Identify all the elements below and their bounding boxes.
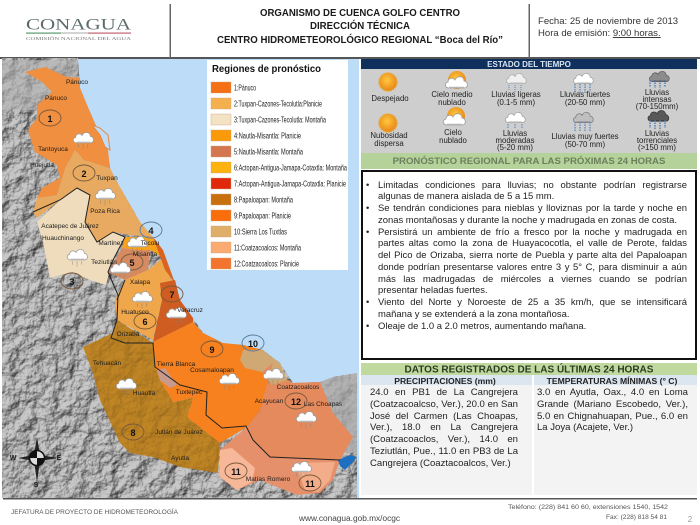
weather key labels: Lluvias <box>503 129 527 138</box>
map city labels: Tuxpan <box>96 175 118 182</box>
precipitation data: José del Carmen (Las Choapas, <box>370 410 518 422</box>
map city labels: Tehuacán <box>93 360 121 367</box>
legend swatches <box>211 82 231 269</box>
forecast heading: PRONÓSTICO REGIONAL PARA LAS PRÓXIMAS 24 HORAS <box>393 155 666 167</box>
date and emission time <box>538 16 678 39</box>
region 10: Sierra Los Tuxtlas <box>240 350 288 385</box>
legend labels: 6:Actopan-Antigua-Jamapa-Cotaxtla: Montaña <box>234 164 347 172</box>
region 4: Nautla planicie <box>122 237 163 258</box>
weather key labels: Despejado <box>371 94 409 103</box>
weather key labels: intensas <box>642 95 672 104</box>
footer website: www.conagua.gob.mx/ocgc <box>298 514 400 523</box>
icon: lluvias ligeras <box>507 73 526 92</box>
minimum temperature data: La Joya (Acajete, Ver.) <box>537 422 633 433</box>
weather key heading: ESTADO DEL TIEMPO <box>487 60 571 69</box>
footer contact: Teléfono: (228) 841 60 60, extensiones 1540, 1542 <box>508 504 668 511</box>
icon: lluvias intensas <box>650 71 669 88</box>
icon: lluvias muy fuertes <box>574 112 593 132</box>
title: DIRECCIÓN TÉCNICA <box>310 19 410 32</box>
forecast text box: • <box>366 297 369 308</box>
forecast text box: • <box>366 320 369 332</box>
region 1: Pánuco <box>25 67 110 198</box>
map city labels: Las Choapas <box>304 401 343 408</box>
compass rose: S <box>34 482 39 489</box>
minimum temperature data <box>537 387 688 433</box>
weather key labels: (>150 mm) <box>638 143 676 152</box>
forecast text box: más las madrugadas de miércoles a viernes cuando se podrían <box>378 274 687 284</box>
map region numbers: 4 <box>148 226 154 236</box>
icon: despejado <box>379 73 397 91</box>
legend labels: 3:Tuxpan-Cazones-Tecolutla: Montaña <box>234 116 326 124</box>
map city labels: Huauchinango <box>42 235 84 242</box>
map region numbers: 8 <box>130 428 136 438</box>
forecast text box: • <box>366 180 369 190</box>
icon: lluvias moderadas <box>506 112 525 129</box>
legend labels: 5:Nautla-Misantla: Montaña <box>234 148 303 156</box>
recorded data heading <box>361 362 697 376</box>
legend labels: 1:Pánuco <box>234 84 256 92</box>
map city labels <box>30 79 343 483</box>
precipitation data: (Coatzacoaclos, Ver.), 14.0 en <box>370 434 518 445</box>
map city labels: Cosamaloapan <box>190 367 234 374</box>
weather key labels: Lluvias <box>645 88 669 97</box>
forecast text box: donde podrían presentarse valores entre 3 y 5° C, para disminuir a aún <box>378 262 687 273</box>
forecast text box: Se tendrán condiciones para nieblas y lloviznas por la tarde y noche en <box>378 203 687 214</box>
forecast text box: zonas montañosas y durante la noche y madrugada en zonas de costa. <box>378 215 677 226</box>
minimum temperature data: 5.0 en Chignahuapan, Pue., 6.0 en <box>537 410 688 422</box>
minimum temperature data: 3.0 en Ayutla, Oax., 4.0 en Loma <box>537 387 688 398</box>
weather key labels: dispersa <box>374 139 404 148</box>
weather key labels: (5-20 mm) <box>497 143 533 152</box>
legend labels: 8:Papaloapan: Montaña <box>234 196 293 204</box>
weather key labels: (0.1-5 mm) <box>497 98 535 107</box>
map city labels: Ayutla <box>171 455 189 462</box>
footer left text: JEFATURA DE PROYECTO DE HIDROMETEOROLOGÍA <box>11 507 179 516</box>
compass rose: W <box>10 455 17 462</box>
forecast text box: presentar heladas fuertes. <box>378 285 488 296</box>
map region numbers: 1 <box>47 114 53 124</box>
map city labels: Huautla <box>133 390 156 397</box>
compass rose: E <box>57 455 62 462</box>
weather key labels: moderadas <box>495 136 535 145</box>
precipitation data <box>370 387 518 468</box>
map <box>2 58 360 499</box>
date and emission time: Fecha: 25 de noviembre de 2013 <box>538 16 678 27</box>
map region numbers: 10 <box>248 339 258 349</box>
map city labels: Veracruz <box>177 307 203 314</box>
region 6: Actopan montaña <box>108 258 172 340</box>
weather key labels <box>370 88 679 152</box>
weather key labels: Cielo <box>444 128 463 137</box>
map region numbers: 11 <box>231 467 241 477</box>
map region numbers: 11 <box>305 479 315 489</box>
forecast text box: Oleaje de 1.0 a 2.0 metros, aumentando mañana. <box>378 320 586 332</box>
recorded data heading: DATOS REGISTRADOS DE LAS ÚLTIMAS 24 HORAS <box>405 362 654 376</box>
region 5: Nautla montaña <box>108 248 150 280</box>
precipitation data: Cangrejera (Coaztacoalcos, Ver.) <box>370 458 511 468</box>
map city labels: Coatzacoalcos <box>277 384 320 391</box>
weather key labels: torrenciales <box>637 136 677 145</box>
lagoon <box>92 125 110 150</box>
table column headers: TEMPERATURAS MÍNIMAS (° C) <box>547 376 678 386</box>
legend labels <box>234 84 347 268</box>
weather key labels: nublado <box>439 136 468 145</box>
map region numbers: 7 <box>169 290 175 300</box>
legend labels: 7:Actopan-Antigua-Jamapa-Cotaxtla: Planicie <box>234 180 346 188</box>
legend labels: 11:Coatzacoalcos: Montaña <box>234 244 301 252</box>
map city labels: Xalapa <box>130 279 150 286</box>
logo: CONAGUA: COMISIÓN NACIONAL DEL AGUA <box>26 36 132 41</box>
map city labels: Tantoyuca <box>38 146 68 153</box>
map region numbers: 2 <box>81 169 87 179</box>
region 12: Coatzacoalcos planicie <box>247 363 353 460</box>
title: ORGANISMO DE CUENCA GOLFO CENTRO <box>260 7 460 19</box>
compass rose <box>10 437 62 489</box>
legend title: Regiones de pronóstico <box>212 64 321 75</box>
title: CENTRO HIDROMETEOROLÓGICO REGIONAL “Boca del Río” <box>217 33 503 46</box>
logo: CONAGUA <box>26 16 132 41</box>
region 11: Coatzacoalcos montaña <box>220 427 340 495</box>
map city labels: Tecolu <box>141 240 160 247</box>
map region numbers: 9 <box>209 345 215 355</box>
table column headers <box>361 375 697 386</box>
weather key labels: nublado <box>438 98 467 107</box>
icon: cielo medio nublado <box>445 71 467 89</box>
legend labels: 12:Coatzacoalcos: Planicie <box>234 260 299 268</box>
map city labels: Martínez <box>98 240 124 247</box>
minimum temperature data: Grande (Mariano Escobedo, Ver.), <box>537 399 688 410</box>
map region numbers: 6 <box>142 317 148 327</box>
date and emission time: Hora de emisión: 9:00 horas. <box>538 28 661 39</box>
forecast text box: algunas de manera aislada de 5 a 15 mm. <box>378 191 554 202</box>
map region numbers: 12 <box>291 397 301 407</box>
icon: nubosidad dispersa <box>379 114 397 132</box>
footer rule <box>3 498 697 500</box>
Tuxtepec patch <box>157 368 177 388</box>
weather key labels: (50-70 mm) <box>565 140 606 149</box>
precipitation data: Ver.), 18.0 en La Cangrejera <box>370 422 518 433</box>
precipitation data: Teziutlán, Pue., 11.0 en PB3 de La <box>370 446 518 457</box>
icon: lluvias fuertes <box>574 73 593 93</box>
weather key labels: Lluvias muy fuertes <box>551 132 619 141</box>
map city labels: Huejutla <box>30 162 54 169</box>
title <box>217 7 503 46</box>
legend labels: 4:Nautla-Misantla: Planicie <box>234 132 301 140</box>
map city labels: Pánuco <box>45 95 67 102</box>
map city labels: Matías Romero <box>246 476 291 483</box>
icon: lluvias torrenciales <box>648 111 669 129</box>
map city labels: Misantla <box>133 251 157 258</box>
forecast text box: • <box>366 226 369 238</box>
footer contact <box>508 504 668 521</box>
map city labels: Tierra Blanca <box>157 361 196 368</box>
region 3: Tuxpan montaña <box>37 188 125 285</box>
weather key labels: Lluvias fuertes <box>560 90 610 99</box>
map region numbers: 5 <box>129 258 135 268</box>
forecast text box: mañana y se extenderá a la zona montañosa. <box>378 309 570 320</box>
weather key labels: Lluvias <box>645 129 669 138</box>
forecast text box: del Pico de Orizaba, sierra norte de Puebla y parte alta del Papaloapan <box>378 250 687 261</box>
forecast text box: Persistirá un ambiente de frío a fresco por la noche y madrugada en <box>378 226 687 238</box>
weather key labels: Nubosidad <box>370 131 408 140</box>
region 7: Actopan planicie <box>153 280 193 342</box>
map city labels: Poza Rica <box>90 208 120 215</box>
map city labels: Acayucan <box>255 398 284 405</box>
forecast heading <box>361 153 697 169</box>
footer contact: Fax: (228) 818 54 81 <box>606 514 667 521</box>
forecast text box <box>361 170 697 360</box>
map city labels: Pánuco <box>66 79 88 86</box>
region borders <box>33 188 340 460</box>
map city labels: Jutlán de Juárez <box>155 429 203 436</box>
icon: cielo nublado <box>443 107 465 125</box>
map city labels: Acatepec de Juárez <box>41 223 99 230</box>
recorded data background <box>361 374 697 495</box>
forecast text box: • <box>366 203 369 214</box>
map city labels: Orizaba <box>117 331 140 338</box>
relief on Papaloapan <box>83 320 223 475</box>
weather key labels: Cielo medio <box>431 90 473 99</box>
precipitation data: 24.0 en PB1 de La Cangrejera <box>370 387 518 398</box>
weather key heading <box>361 59 697 69</box>
precipitation data: (Coatzacoalcso, Ver.), 20.0 en San <box>370 399 518 410</box>
map city labels: Teziutlán <box>91 259 117 266</box>
logo: CONAGUA: CONAGUA <box>26 16 132 34</box>
forecast text box: Viento del Norte y Noroeste de 25 a 35 km/h, que se intensificará <box>378 297 687 308</box>
reservoir <box>338 455 357 470</box>
legend labels: 9:Papaloapan: Planicie <box>234 212 291 220</box>
table column headers: PRECIPITACIONES (mm) <box>394 376 496 386</box>
legend panel <box>207 60 348 270</box>
weather key labels: Lluvias ligeras <box>491 90 541 99</box>
weather key panel <box>361 59 697 154</box>
legend labels: 2:Tuxpan-Cazones-Tecolutla:Planicie <box>234 100 322 108</box>
map region numbers: 3 <box>69 277 75 287</box>
region 9: Papaloapan planicie <box>153 322 273 443</box>
header background rules <box>0 4 700 59</box>
map region numbers <box>39 110 321 491</box>
region 8: Papaloapan montaña <box>83 320 220 473</box>
region 2: Tuxpan planicie <box>33 150 153 242</box>
forecast text box: Limitadas condiciones para lluvias; no obstante podrían registrarse <box>378 180 687 190</box>
weather key labels: (20-50 mm) <box>565 98 606 107</box>
page number: 2 <box>688 515 693 524</box>
map cloud icons <box>67 132 316 478</box>
forecast text box: partes altas como la zona de Huayacocotla, el valle de Perote, faldas <box>378 238 687 249</box>
map city labels: Huatusco <box>121 309 149 316</box>
weather key labels: (70-150mm) <box>636 102 679 111</box>
legend labels: 10:Sierra Los Tuxtlas <box>234 228 287 236</box>
map city labels: Tuxtepec <box>176 389 203 396</box>
